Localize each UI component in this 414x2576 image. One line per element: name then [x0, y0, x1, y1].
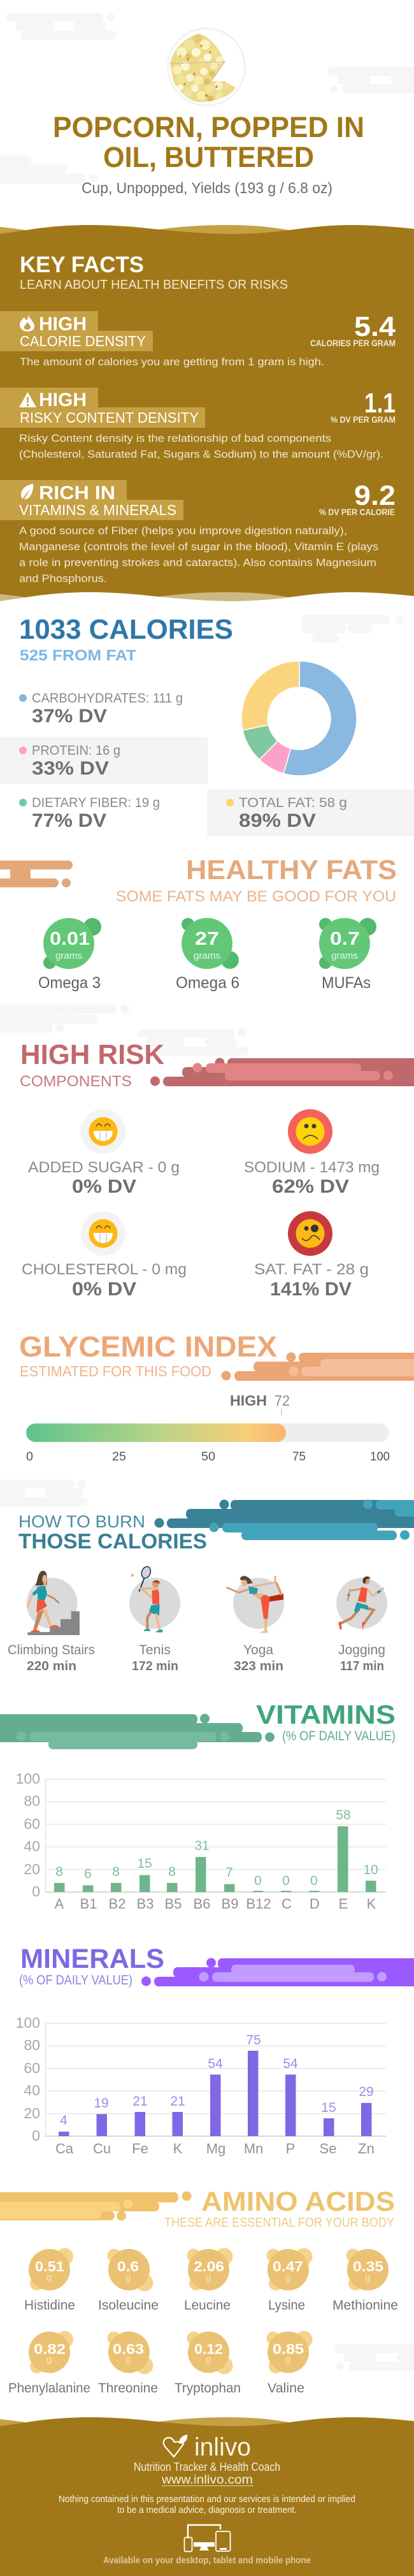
icon: flame	[20, 314, 34, 331]
bar chart: vitamins: 40	[24, 1838, 40, 1854]
bar chart: minerals: 0	[32, 2127, 40, 2144]
item: added sugar: 0% DV	[72, 1176, 136, 1197]
subheading: glycemic index: ESTIMATED FOR THIS FOOD	[20, 1363, 211, 1379]
fact: rich in vitamins and minerals	[0, 480, 396, 585]
banner: amino acids	[0, 2192, 191, 2221]
bar chart: minerals: Fe	[132, 2141, 148, 2157]
icon: leaf	[21, 484, 33, 499]
legend: protein: PROTEIN: 16 g	[32, 743, 120, 758]
stat: omega 3	[38, 918, 101, 992]
bar chart: minerals: Cu	[93, 2141, 111, 2157]
item: cholesterol: CHOLESTEROL - 0 mg	[22, 1261, 187, 1278]
bar chart: vitamins: B12	[246, 1896, 271, 1912]
amino: valine	[266, 2331, 312, 2396]
panel: vitamins	[0, 1699, 396, 1912]
availability note: Available on your desktop, tablet and mobile phone	[103, 2555, 311, 2566]
bar chart: vitamins: 0	[282, 1874, 290, 1888]
subheading: calories from fat: 525 FROM FAT	[20, 647, 136, 664]
subtitle: serving size: Cup, Unpopped, Yields (193 g / 6.8 oz)	[82, 180, 332, 197]
activity: tennis: Tenis	[139, 1643, 171, 1657]
amino: tryptophan: 0.12	[194, 2341, 223, 2357]
legend: total fat	[207, 789, 414, 836]
fact: rich in vitamins and minerals: RICH IN	[39, 483, 115, 504]
amino: histidine: Histidine	[24, 2298, 75, 2313]
bar chart: vitamins: B6	[194, 1896, 210, 1912]
legend: carbohydrates: CARBOHYDRATES: 111 g	[32, 691, 183, 706]
amino: lysine: 0.47	[273, 2259, 303, 2274]
bar chart: minerals: 40	[24, 2082, 40, 2099]
bar chart: vitamins: 15	[137, 1856, 152, 1871]
bar chart: minerals: 29	[359, 2085, 374, 2099]
amino: phenylalanine: g	[46, 2354, 52, 2365]
stat: omega 6	[176, 918, 239, 992]
bar chart: minerals: 80	[24, 2037, 40, 2053]
bar chart: vitamins: B9	[222, 1896, 238, 1912]
legend: total fat: 89% DV	[239, 810, 316, 831]
bar chart: vitamins: 0	[310, 1874, 318, 1888]
amino: histidine: g	[46, 2272, 52, 2283]
gauge scale: 25	[112, 1450, 126, 1464]
amino: methionine	[332, 2249, 398, 2313]
banner: minerals	[141, 1958, 414, 1986]
bar chart: vitamins: B3	[137, 1896, 153, 1912]
disclaimer	[59, 2494, 355, 2515]
heading: high risk: HIGH RISK	[20, 1040, 165, 1070]
logo: inlivo: inlivo	[194, 2433, 251, 2461]
banner: vitamins	[0, 1714, 275, 1749]
item: saturated fat: 141% DV	[270, 1279, 352, 1300]
bar chart: vitamins: 58	[336, 1808, 351, 1823]
panel: how to burn calories	[8, 1499, 414, 1673]
amino: tryptophan: g	[206, 2354, 211, 2365]
stat: omega 3: Omega 3	[38, 974, 101, 992]
legend: protein: 33% DV	[32, 758, 109, 779]
legend: dietary fiber	[19, 796, 160, 831]
bar chart: vitamins: 7	[225, 1865, 233, 1880]
bar chart: minerals: 15	[321, 2100, 336, 2115]
item: sodium	[244, 1109, 380, 1197]
bar chart: vitamins: A	[55, 1896, 64, 1912]
bar chart: minerals: Se	[320, 2141, 336, 2157]
heading: healthy fats: HEALTHY FATS	[186, 855, 397, 885]
stat: omega 3: 0.01	[50, 929, 90, 949]
title: POPCORN, POPPED IN	[53, 111, 364, 143]
panel: glycemic index	[19, 1330, 414, 1464]
bar chart: vitamins: 6	[84, 1867, 92, 1881]
tagline: Nutrition Tracker & Health Coach	[134, 2461, 280, 2473]
gauge value: HIGH	[230, 1392, 267, 1409]
bar chart: vitamins: B1	[80, 1896, 97, 1912]
item: cholesterol	[22, 1211, 187, 1300]
fact: risky content density: Risky Content density is the relationship of bad components	[19, 432, 331, 444]
legend: carbohydrates	[19, 691, 183, 727]
heading: how to burn: HOW TO BURN	[18, 1512, 145, 1531]
subheading: vitamins: (% OF DAILY VALUE)	[282, 1729, 396, 1743]
stat: MUFAs: 0.7	[330, 929, 360, 949]
amino: threonine: 0.63	[113, 2341, 144, 2357]
amino: threonine: g	[125, 2354, 131, 2365]
amino: methionine: 0.35	[353, 2259, 383, 2274]
item: saturated fat: SAT. FAT - 28 g	[254, 1261, 369, 1278]
panel: high risk components	[20, 1040, 414, 1300]
heading: key facts: KEY FACTS	[20, 252, 144, 277]
bar chart: minerals: Mn	[244, 2141, 263, 2157]
gauge scale: 100	[370, 1450, 390, 1464]
amino: isoleucine: g	[125, 2272, 131, 2283]
amino: threonine	[98, 2332, 158, 2396]
item: cholesterol: 0% DV	[72, 1279, 136, 1300]
fact: risky content density: (Cholesterol, Saturated Fat, Sugars & Sodium) to the amount (%DV/gr).	[19, 448, 383, 460]
bar chart: vitamins: 80	[24, 1793, 40, 1809]
fact: rich in vitamins and minerals: A good source of Fiber (helps you improve digestion naturally),	[19, 525, 347, 537]
stat: MUFAs: MUFAs	[322, 974, 371, 992]
amino: valine: g	[285, 2354, 290, 2365]
amino: leucine	[184, 2248, 233, 2313]
fact: risky content density: RISKY CONTENT DENSITY	[20, 409, 199, 426]
amino: histidine: 0.51	[35, 2259, 64, 2274]
banner: burn	[154, 1499, 414, 1540]
bar chart: minerals: Zn	[358, 2141, 375, 2157]
fact: rich in vitamins and minerals: Manganese (controls the level of sugar in the blood), Vitamin E (plays	[19, 541, 378, 553]
stat: omega 6: Omega 6	[176, 974, 239, 992]
stat: MUFAs	[319, 918, 376, 992]
amino: valine: 0.85	[273, 2341, 304, 2357]
legend: total fat: TOTAL FAT: 58 g	[239, 796, 347, 810]
bar chart: minerals: 21	[170, 2094, 185, 2109]
bar chart: minerals: 54	[208, 2056, 223, 2071]
amino: isoleucine: Isoleucine	[98, 2298, 159, 2313]
bar chart: vitamins: 0	[32, 1883, 40, 1900]
fact: calorie density: HIGH	[39, 314, 87, 335]
legend: carbohydrates: 37% DV	[32, 706, 107, 727]
fact: rich in vitamins and minerals: % DV PER CALORIE	[319, 507, 395, 517]
bar chart: vitamins: 20	[24, 1861, 40, 1877]
bar chart: vitamins: C	[282, 1896, 292, 1912]
banner: high risk	[150, 1058, 414, 1086]
legend: protein	[0, 737, 208, 784]
activity: jogging	[336, 1576, 387, 1673]
disclaimer: to be a medical advice, diagnosis or treatment.	[117, 2505, 297, 2515]
amino: phenylalanine: 0.82	[34, 2341, 66, 2357]
bar chart: vitamins: 8	[112, 1865, 120, 1879]
amino: isoleucine	[98, 2249, 159, 2313]
gauge bar	[26, 1423, 389, 1442]
amino: tryptophan: Tryptophan	[175, 2381, 241, 2396]
gauge value: 72	[275, 1392, 290, 1409]
heading: vitamins: VITAMINS	[256, 1699, 396, 1729]
amino: phenylalanine: Phenylalanine	[8, 2381, 90, 2396]
heading: glycemic index: GLYCEMIC INDEX	[19, 1330, 277, 1363]
stat: omega 3: grams	[55, 950, 82, 961]
bar chart: minerals: 4	[60, 2113, 68, 2128]
amino: lysine: Lysine	[268, 2298, 305, 2313]
fact: risky content density: % DV PER GRAM	[331, 415, 396, 425]
fact: calorie density: CALORIES PER GRAM	[310, 338, 396, 348]
gauge scale: 50	[201, 1450, 215, 1464]
amino: threonine: Threonine	[98, 2381, 158, 2396]
gauge scale	[26, 1450, 390, 1464]
item: saturated fat	[254, 1211, 369, 1300]
bar chart: vitamins: 100	[16, 1770, 40, 1787]
bar chart: vitamins: D	[310, 1896, 320, 1912]
fact: calorie density: CALORIE DENSITY	[20, 333, 146, 349]
amino: valine: Valine	[268, 2381, 304, 2396]
panel: footer	[0, 2417, 414, 2576]
heading: those calories: THOSE CALORIES	[18, 1529, 207, 1553]
bar chart: minerals: 20	[24, 2105, 40, 2121]
disclaimer: Nothing contained in this presentation and our services is intended or implied	[59, 2494, 355, 2505]
fact: risky content density: HIGH	[39, 389, 87, 411]
activity: jogging: Jogging	[338, 1643, 385, 1657]
donut chart	[241, 661, 357, 776]
bar chart: vitamins: 31	[194, 1838, 210, 1853]
fact: calorie density	[0, 311, 396, 368]
bar chart: minerals: P	[286, 2141, 295, 2157]
fact: risky content density: 1.1	[364, 388, 396, 419]
bar chart: minerals: 21	[132, 2094, 148, 2109]
amino: tryptophan	[175, 2332, 241, 2396]
bar chart: vitamins: 0	[254, 1874, 262, 1888]
panel: key facts	[0, 225, 414, 606]
item: sodium: 62% DV	[272, 1176, 349, 1197]
item: sodium: SODIUM - 1473 mg	[244, 1159, 380, 1176]
activity: climbing stairs: Climbing Stairs	[8, 1643, 95, 1657]
stat: omega 6: grams	[194, 950, 220, 961]
amino: leucine: Leucine	[184, 2298, 231, 2313]
fact: rich in vitamins and minerals: VITAMINS & MINERALS	[19, 502, 176, 518]
heading: minerals: MINERALS	[20, 1944, 164, 1974]
bar chart: vitamins: 60	[24, 1816, 40, 1832]
gauge scale: 75	[292, 1450, 306, 1464]
fact: calorie density: The amount of calories you are getting from 1 gram is high.	[20, 356, 324, 368]
legend: dietary fiber: 77% DV	[32, 810, 106, 831]
icon: devices	[185, 2525, 231, 2551]
stat: MUFAs: grams	[331, 950, 358, 961]
bar chart: minerals: 60	[24, 2060, 40, 2076]
amino: lysine: g	[285, 2272, 290, 2283]
title	[53, 111, 364, 173]
bar chart: vitamins: 10	[363, 1863, 378, 1877]
stat: omega 6: 27	[195, 929, 219, 949]
activity: jogging: 117 min	[340, 1659, 384, 1673]
bar chart: vitamins: 8	[168, 1865, 176, 1879]
gauge scale: 0	[26, 1450, 33, 1464]
fact: calorie density: 5.4	[354, 311, 396, 342]
subheading: healthy fats: SOME FATS MAY BE GOOD FOR YOU	[116, 888, 396, 905]
subheading: amino acids: THESE ARE ESSENTIAL FOR YOUR BODY	[164, 2216, 394, 2230]
activity: climbing stairs: 220 min	[27, 1659, 76, 1673]
activity: yoga	[227, 1576, 284, 1673]
heading: calories: 1033 CALORIES	[19, 614, 233, 645]
bar chart: minerals	[16, 2014, 386, 2157]
panel: calories	[0, 614, 414, 836]
subheading: components: COMPONENTS	[20, 1073, 132, 1090]
panel: minerals	[16, 1944, 414, 2157]
item: added sugar	[28, 1109, 180, 1197]
amino: leucine: 2.06	[194, 2259, 224, 2274]
activity: yoga: 323 min	[234, 1659, 283, 1673]
amino: lysine	[266, 2248, 312, 2313]
website link: www.inlivo.com	[161, 2473, 253, 2487]
fact: rich in vitamins and minerals: 9.2	[354, 480, 396, 511]
activity: yoga: Yoga	[243, 1643, 273, 1657]
bar chart: vitamins: B2	[109, 1896, 125, 1912]
amino: leucine: g	[206, 2272, 211, 2283]
banner: glycemic	[222, 1353, 414, 1381]
fact: rich in vitamins and minerals: and Phosphorus.	[19, 572, 107, 585]
popcorn photo	[167, 28, 245, 106]
logo: inlivo	[164, 2433, 251, 2461]
item: added sugar: ADDED SUGAR - 0 g	[28, 1159, 180, 1176]
amino: phenylalanine	[8, 2331, 90, 2396]
amino: histidine	[24, 2248, 75, 2313]
bar chart: minerals: K	[173, 2141, 183, 2157]
bar chart: vitamins: B5	[165, 1896, 182, 1912]
icon: warning	[19, 392, 36, 407]
activity: tennis	[129, 1566, 180, 1673]
bar chart: minerals: 75	[246, 2033, 261, 2048]
fact: rich in vitamins and minerals: a role in preventing strokes and cataracts). Also contains Magnesium	[19, 557, 376, 569]
bar chart: vitamins: K	[367, 1896, 376, 1912]
bar chart: minerals: 19	[94, 2096, 109, 2111]
bar chart: minerals: 54	[283, 2056, 298, 2071]
title: OIL, BUTTERED	[103, 141, 314, 173]
amino: methionine: g	[365, 2272, 370, 2283]
activity: tennis: 172 min	[132, 1659, 178, 1673]
amino: methionine: Methionine	[332, 2298, 398, 2313]
bar chart: vitamins: E	[339, 1896, 348, 1912]
bar chart: vitamins	[16, 1770, 386, 1912]
gauge value	[230, 1392, 290, 1416]
activity: climbing stairs	[8, 1571, 95, 1673]
panel: amino acids	[0, 2187, 398, 2396]
legend: dietary fiber: DIETARY FIBER: 19 g	[32, 796, 160, 810]
panel: healthy fats	[0, 855, 397, 992]
fact: risky content density	[0, 388, 396, 460]
amino: isoleucine: 0.6	[117, 2259, 139, 2274]
bar chart: vitamins: 8	[55, 1865, 63, 1879]
heading: amino acids: AMINO ACIDS	[201, 2187, 395, 2217]
subheading: minerals: (% OF DAILY VALUE)	[19, 1973, 132, 1988]
subheading: key facts: LEARN ABOUT HEALTH BENEFITS OR RISKS	[20, 278, 288, 292]
bar chart: minerals: 100	[16, 2014, 40, 2031]
bar chart: minerals: Mg	[206, 2141, 225, 2157]
bar chart: minerals: Ca	[55, 2141, 74, 2157]
